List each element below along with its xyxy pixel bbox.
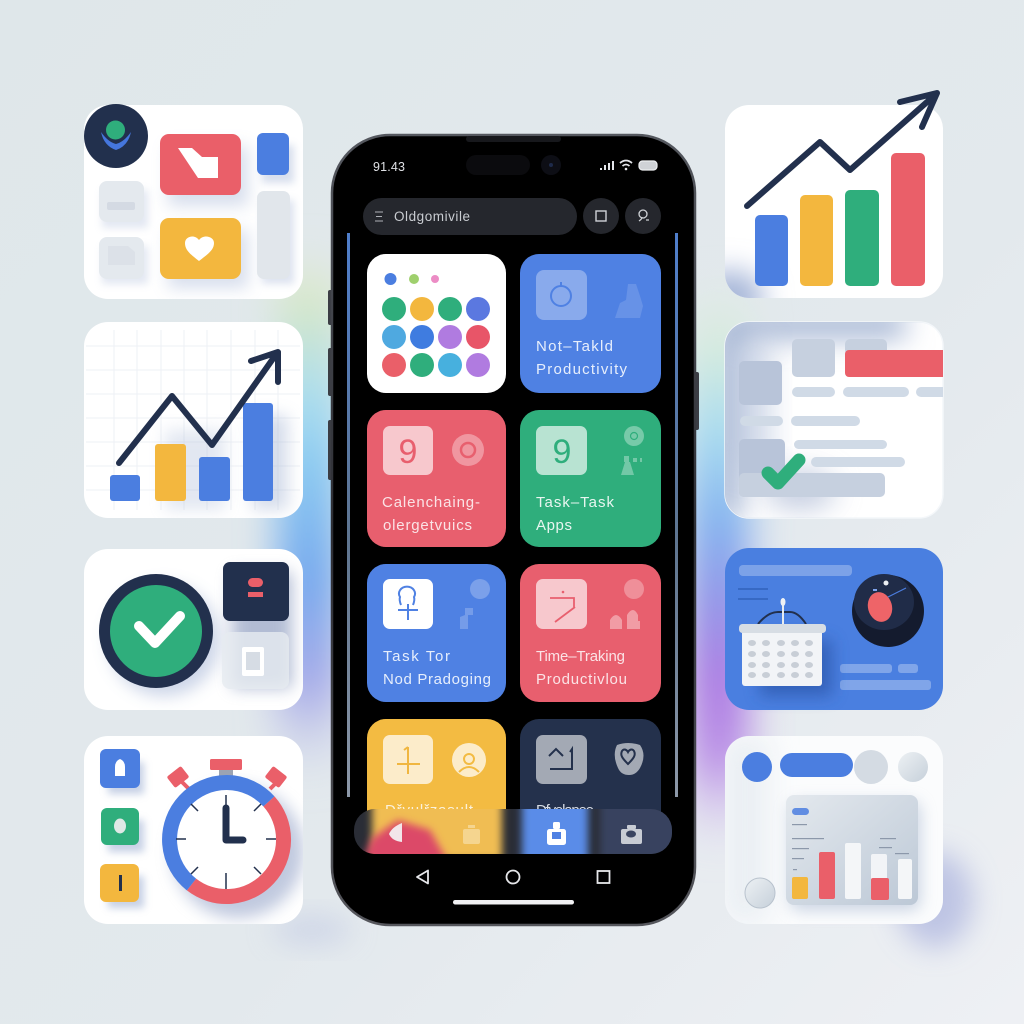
status icons <box>600 160 657 170</box>
tile: calendar: olergetvuics <box>383 517 472 534</box>
tile: task tools: Nod Pradoging <box>383 671 491 688</box>
tile: time tracking: Time–Traking <box>536 648 625 665</box>
icon: green check <box>768 460 799 483</box>
tile: productivity: Not–Takld <box>536 338 613 355</box>
dashboard panel shadow <box>790 802 920 910</box>
left card 3: completed check <box>84 549 303 710</box>
icon: blue tile <box>257 133 289 175</box>
document blocks <box>739 339 956 497</box>
speaker notch <box>466 136 561 142</box>
icon: navy tile <box>223 562 289 621</box>
bar chart <box>792 843 912 900</box>
search square button <box>583 198 619 234</box>
right rail <box>675 233 678 797</box>
tab icon: active bag <box>547 822 566 845</box>
tile: yellow <box>367 719 506 839</box>
tile: task apps: 9 <box>553 433 571 471</box>
red banner <box>845 350 943 377</box>
android home button <box>506 870 520 884</box>
tile: task apps <box>520 410 661 547</box>
tile: calendar: Calenchaing‑ <box>382 494 480 511</box>
right card 4: dashboard <box>720 736 943 924</box>
right card 3: blue calendar <box>725 548 943 710</box>
icon: grey tile one <box>99 181 144 222</box>
tile: yellow: Dřvulřzasult <box>385 802 474 819</box>
tile: task apps: Apps <box>536 517 572 534</box>
camera island <box>466 155 561 175</box>
bar chart <box>755 153 925 286</box>
tab icon: bag <box>463 825 480 844</box>
left card 2: growth chart <box>84 322 303 518</box>
tile: time tracking: Productivlou <box>536 671 627 688</box>
tab icon: camera <box>621 825 642 844</box>
tile: task tools <box>367 564 506 702</box>
tile: task apps: Task–Task <box>536 494 614 511</box>
tile: colour palette <box>367 254 506 393</box>
icon: tall grey tile <box>257 191 290 279</box>
bar chart <box>110 403 273 501</box>
android recents button <box>598 871 610 883</box>
left card 1: app widgets <box>84 104 303 299</box>
tile: time tracking <box>520 564 661 702</box>
left card 4: stopwatch <box>84 736 304 924</box>
icon: yellow heart tile <box>160 218 241 279</box>
icon: yellow tile <box>100 864 139 902</box>
icon: green fingerprint tile <box>101 808 139 845</box>
toolbar <box>742 750 928 784</box>
home indicator <box>453 900 574 904</box>
tile: productivity: Productivity <box>536 361 628 378</box>
profile button <box>625 198 661 234</box>
phone <box>328 135 699 925</box>
tile: task tools: Task Tor <box>383 648 450 665</box>
search bar <box>363 198 577 235</box>
tile: calendar <box>367 410 506 547</box>
icon: stopwatch <box>167 759 287 897</box>
android back button <box>417 870 428 884</box>
tab icon: home <box>389 823 402 842</box>
background colour glow <box>272 250 973 948</box>
tile: navy: Dfvolapee <box>536 802 594 819</box>
phone side buttons <box>328 290 699 480</box>
arrow: trend line <box>119 352 278 463</box>
icon: red folder tile <box>160 134 241 195</box>
icon: blue bell tile <box>100 749 140 788</box>
status time: 91.43 <box>373 160 405 174</box>
icon: frosted tile <box>222 632 289 689</box>
icon: green check circle <box>99 574 213 688</box>
bottom tab bar <box>354 809 672 854</box>
text placeholders <box>738 565 931 690</box>
dashboard panel <box>786 795 918 905</box>
right card 1: growth bars <box>725 90 943 298</box>
icon: grey tile two <box>99 237 144 279</box>
tile: calendar: 9 <box>399 433 417 471</box>
tile: productivity <box>520 254 661 393</box>
phone body <box>332 135 695 925</box>
left rail <box>347 233 350 797</box>
icon: dark dial <box>852 574 924 647</box>
icon: small grey button <box>745 878 775 908</box>
right card 2: document checklist <box>725 322 956 520</box>
tile: navy <box>520 719 661 839</box>
arrow: trend line <box>747 93 937 206</box>
icon: calendar <box>739 598 832 696</box>
search bar: Oldgomivile <box>394 209 470 224</box>
icon: navy badge <box>84 104 148 168</box>
